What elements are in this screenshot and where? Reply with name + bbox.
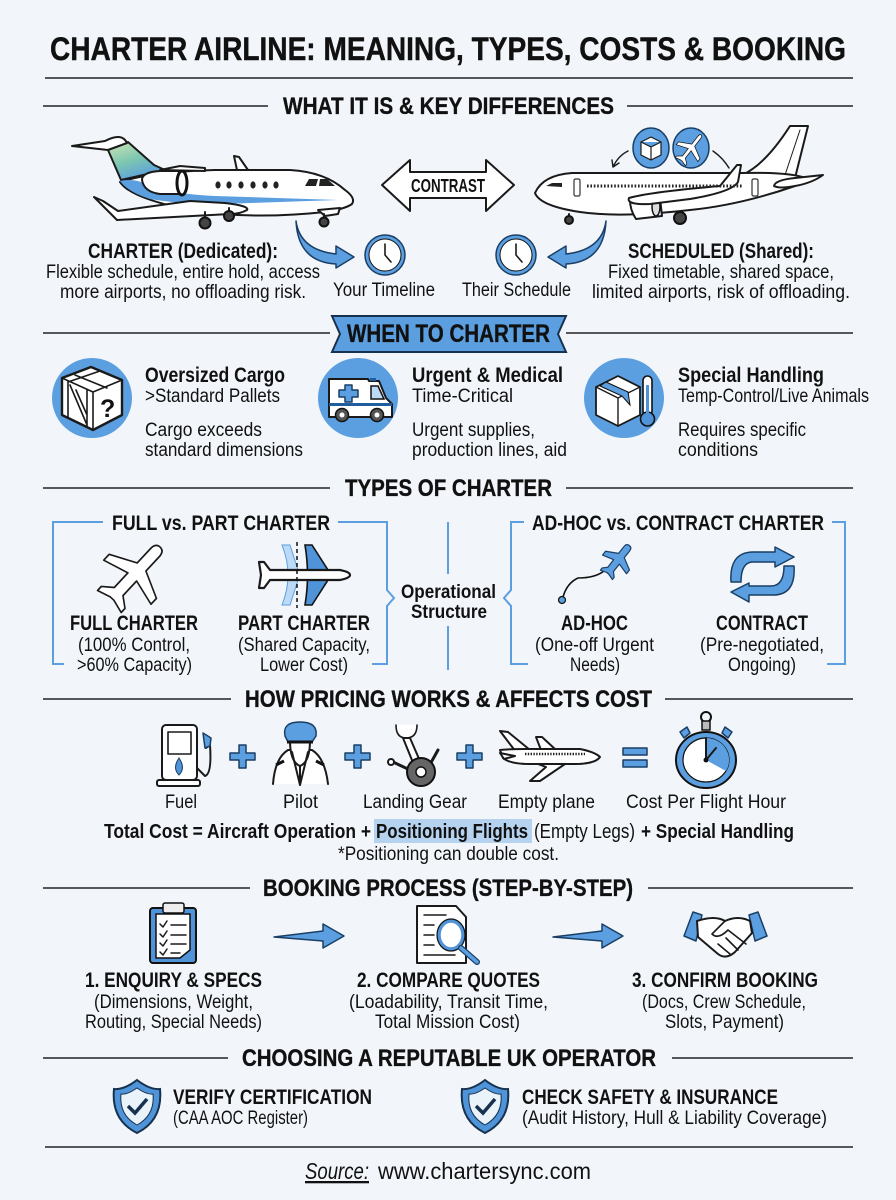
text: step 1: Routing, Special Needs)	[85, 1012, 262, 1033]
section: types of charter	[43, 475, 853, 676]
label: contract: CONTRACT	[716, 612, 808, 635]
text: charter description: CHARTER (Dedicated):	[88, 240, 278, 263]
text: safety and insurance	[522, 1086, 827, 1129]
arrow: contrast	[382, 160, 514, 211]
text: scheduled description: Fixed timetable, shared space,	[608, 262, 834, 283]
icon: ad-hoc plane with path	[558, 536, 641, 604]
source: www.chartersync.com	[377, 1158, 591, 1184]
text: safety and insurance: CHECK SAFETY & INSURANCE	[522, 1086, 778, 1109]
icon: crate	[52, 358, 132, 438]
text: special handling: conditions	[678, 440, 758, 461]
icon: box with thermometer	[584, 358, 664, 438]
text: verify certification: VERIFY CERTIFICATION	[173, 1086, 372, 1109]
label: full charter: >60% Capacity)	[77, 655, 192, 676]
arrow: step 1 to 2	[274, 924, 344, 948]
section: choosing operator	[43, 1045, 853, 1133]
text: step 3	[632, 969, 818, 1033]
text: scheduled description: limited airports, risk of offloading.	[592, 282, 850, 303]
heading: booking process: BOOKING PROCESS (STEP-BY-STEP)	[263, 875, 633, 902]
heading banner: when to charter	[43, 316, 853, 352]
icon: empty plane	[500, 731, 600, 781]
text: urgent and medical: production lines, aid	[412, 440, 567, 461]
text: oversized cargo: standard dimensions	[145, 440, 303, 461]
formula: total cost: Total Cost = Aircraft Operation +	[104, 821, 371, 843]
arrow: step 2 to 3	[553, 924, 623, 948]
icon: plane circle	[670, 127, 712, 170]
text: verify certification: (CAA AOC Register)	[173, 1108, 308, 1129]
text: oversized cargo: >Standard Pallets	[145, 386, 280, 407]
note: positioning: *Positioning can double cost.	[338, 844, 559, 865]
labels: cost factors: Fuel	[165, 792, 197, 813]
panel: ad-hoc vs contract charter	[504, 512, 845, 676]
label: contract: (Pre-negotiated,	[700, 635, 824, 656]
text: special handling: Special Handling	[678, 364, 824, 387]
label: full charter: FULL CHARTER	[70, 612, 198, 635]
center: operational structure	[401, 522, 496, 670]
center: operational structure: Structure	[411, 602, 487, 623]
plus	[457, 745, 482, 768]
icon: clock their schedule	[496, 235, 536, 275]
formula: total cost	[104, 819, 794, 843]
section: booking process	[43, 875, 853, 1033]
text: step 2: (Loadability, Transit Time,	[349, 992, 548, 1013]
formula: total cost: + Special Handling	[641, 821, 794, 843]
icon: clipboard	[150, 903, 196, 963]
text: safety and insurance: (Audit History, Hull & Liability Coverage)	[522, 1108, 827, 1129]
text: step 3: 3. CONFIRM BOOKING	[632, 969, 818, 992]
text: urgent and medical	[412, 364, 567, 461]
label: ad-hoc: Needs)	[570, 655, 620, 676]
source: Source:	[305, 1158, 369, 1184]
icon: pilot	[273, 722, 328, 785]
formula: total cost: Positioning Flights	[376, 821, 528, 843]
icon: document with magnifier	[417, 906, 477, 963]
labels: cost factors: Pilot	[283, 792, 319, 813]
text: special handling	[678, 364, 869, 461]
section: when to charter	[43, 316, 869, 461]
text: oversized cargo	[145, 364, 303, 461]
arrow: charter to your timeline	[296, 221, 354, 268]
plus	[230, 745, 255, 768]
heading: pricing: HOW PRICING WORKS & AFFECTS COST	[245, 686, 652, 713]
text: urgent and medical: Time-Critical	[412, 386, 513, 407]
heading banner: when to charter: WHEN TO CHARTER	[347, 320, 550, 348]
icon: shield verify	[114, 1080, 160, 1133]
heading: choosing operator: CHOOSING A REPUTABLE UK OPERATOR	[242, 1045, 656, 1072]
formula: total cost: (Empty Legs)	[534, 821, 635, 843]
label: part charter: PART CHARTER	[238, 612, 370, 635]
label: their schedule: Their Schedule	[462, 280, 571, 301]
icon: crate: ?	[100, 395, 115, 423]
icon: shield safety	[462, 1080, 508, 1133]
text: step 3: Slots, Payment)	[665, 1012, 784, 1033]
text: special handling: Requires specific	[678, 420, 806, 441]
label: part charter: Lower Cost)	[260, 655, 348, 676]
icon: part charter plane	[259, 542, 350, 608]
icon: ambulance	[318, 358, 398, 438]
labels: cost factors	[165, 792, 787, 813]
text: step 1	[85, 969, 262, 1033]
icon: scheduled airliner	[535, 126, 823, 224]
text: scheduled description: SCHEDULED (Shared):	[628, 240, 814, 263]
arrow: scheduled to their schedule	[548, 221, 606, 268]
label: ad-hoc: AD-HOC	[561, 612, 628, 635]
text: charter description	[46, 240, 320, 303]
text: charter description: Flexible schedule, entire hold, access	[46, 262, 320, 283]
label: full charter: (100% Control,	[78, 635, 190, 656]
icon: landing gear	[388, 725, 438, 786]
subheading: full vs part: FULL vs. PART CHARTER	[112, 512, 330, 535]
labels: cost factors: Cost Per Flight Hour	[626, 792, 787, 813]
section: pricing	[43, 686, 853, 865]
text: urgent and medical: Urgent supplies,	[412, 420, 535, 441]
labels: cost factors: Landing Gear	[363, 792, 468, 813]
icon: clock your timeline	[365, 235, 405, 275]
icon: charter jet	[72, 137, 353, 228]
labels: cost factors: Empty plane	[498, 792, 595, 813]
text: step 2	[349, 969, 548, 1033]
label: ad-hoc: (One-off Urgent	[535, 635, 655, 656]
text: scheduled description	[592, 240, 850, 303]
icon: contract loop arrows	[731, 547, 794, 602]
text: step 2: 2. COMPARE QUOTES	[357, 969, 540, 992]
center: operational structure: Operational	[401, 582, 496, 603]
card: oversized cargo	[52, 358, 303, 461]
text: step 2: Total Mission Cost)	[375, 1012, 520, 1033]
card: urgent and medical	[318, 358, 567, 461]
subheading: ad-hoc vs contract: AD-HOC vs. CONTRACT CHARTER	[532, 512, 824, 535]
plus	[345, 745, 370, 768]
label: ad-hoc	[535, 612, 655, 676]
heading: types of charter: TYPES OF CHARTER	[345, 475, 552, 502]
heading: what it is: WHAT IT IS & KEY DIFFERENCES	[283, 93, 614, 120]
label: your timeline: Your Timeline	[333, 280, 435, 301]
equals	[623, 748, 647, 767]
icon: fuel pump	[157, 725, 211, 786]
card: special handling	[584, 358, 869, 461]
text: step 1: 1. ENQUIRY & SPECS	[85, 969, 262, 992]
icon: box circle	[633, 128, 669, 168]
label: part charter	[238, 612, 370, 676]
label: contract	[700, 612, 824, 676]
text: step 3: (Docs, Crew Schedule,	[642, 992, 806, 1013]
text: oversized cargo: Cargo exceeds	[145, 420, 262, 441]
label: full charter	[70, 612, 198, 676]
panel: full vs part charter	[53, 512, 394, 676]
label: contract: Ongoing)	[728, 655, 796, 676]
text: step 1: (Dimensions, Weight,	[94, 992, 253, 1013]
icon: handshake	[684, 912, 767, 957]
section: what it is and key differences	[43, 93, 853, 303]
label: part charter: (Shared Capacity,	[238, 635, 370, 656]
text: verify certification	[173, 1086, 372, 1129]
arrow: contrast: CONTRAST	[411, 176, 485, 196]
icon: full charter plane	[86, 525, 184, 624]
text: oversized cargo: Oversized Cargo	[145, 364, 285, 387]
text: urgent and medical: Urgent & Medical	[412, 364, 563, 387]
text: charter description: more airports, no offloading risk.	[60, 282, 306, 303]
icon: stopwatch	[676, 712, 736, 788]
